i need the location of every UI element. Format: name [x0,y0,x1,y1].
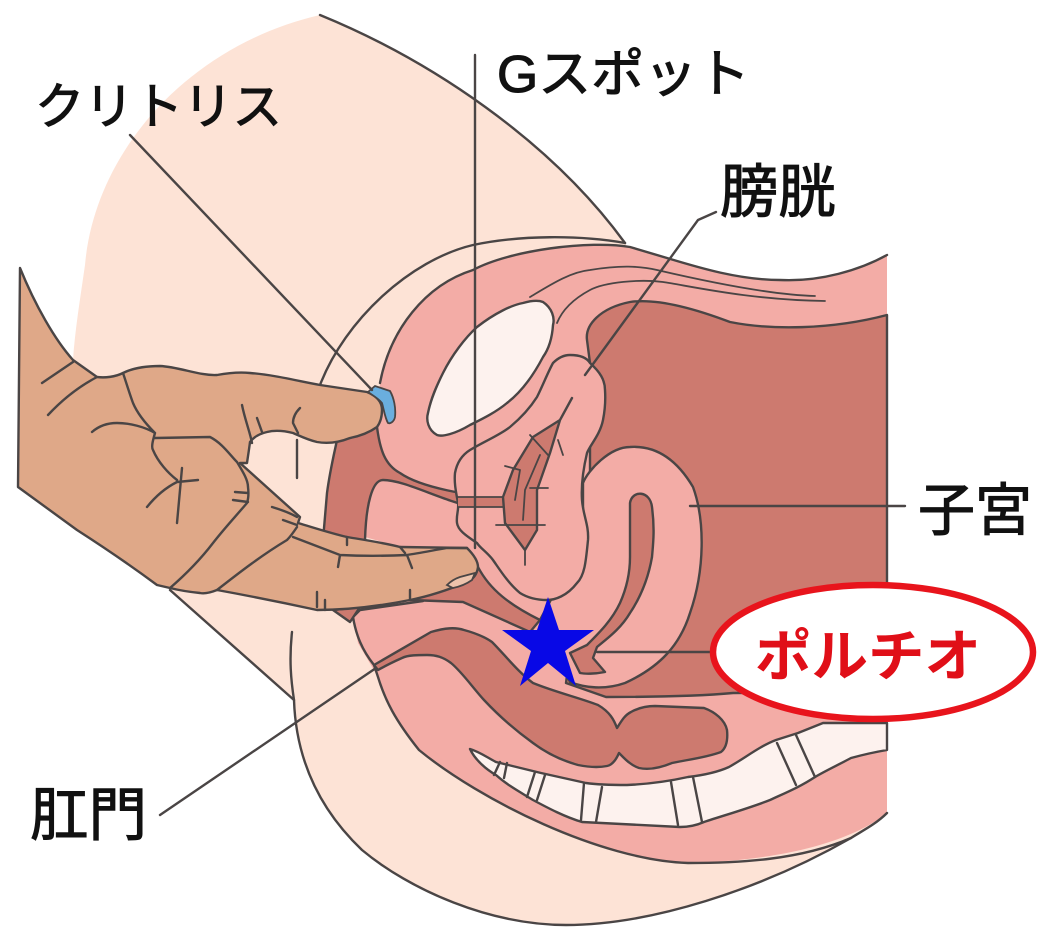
icon: fingernail [447,573,475,588]
label: bladder: 膀胱 [720,160,836,225]
panel: vaginal wall [323,427,505,540]
leader line: bladder [585,212,716,375]
icon: urethra and inner cavity [458,398,572,565]
label: G-spot: Gスポット [497,46,750,104]
finger and palm lines [42,362,467,610]
leader line: portio [597,651,712,653]
callout: portio: ポルチオ [755,625,981,688]
panel: bladder [455,355,605,600]
panel: body skin [73,15,887,925]
panel: lower vaginal wall [410,567,540,632]
label: clitoris: クリトリス [35,79,282,135]
label: uterus: 子宮 [918,479,1032,543]
leader line: G-spot [474,55,476,548]
panel: rectum [374,628,727,769]
leader line: anus [160,668,376,815]
panel: uterus [540,447,702,687]
label: anus: 肛門 [30,783,147,848]
leader line: clitoris [130,135,372,390]
icon: clitoris [368,386,395,423]
panel: sacrum [470,723,887,827]
icon: cervical canal [570,494,654,674]
callout: portio [713,585,1033,719]
icon: pubic bone [427,301,554,436]
panel: small wedge [333,607,360,622]
panel: abdominal cavity [566,301,887,697]
icon: hand [18,268,478,610]
leader line: uterus [690,505,905,507]
icon: blue star [502,597,594,686]
panel: pelvic tissue [353,245,887,863]
